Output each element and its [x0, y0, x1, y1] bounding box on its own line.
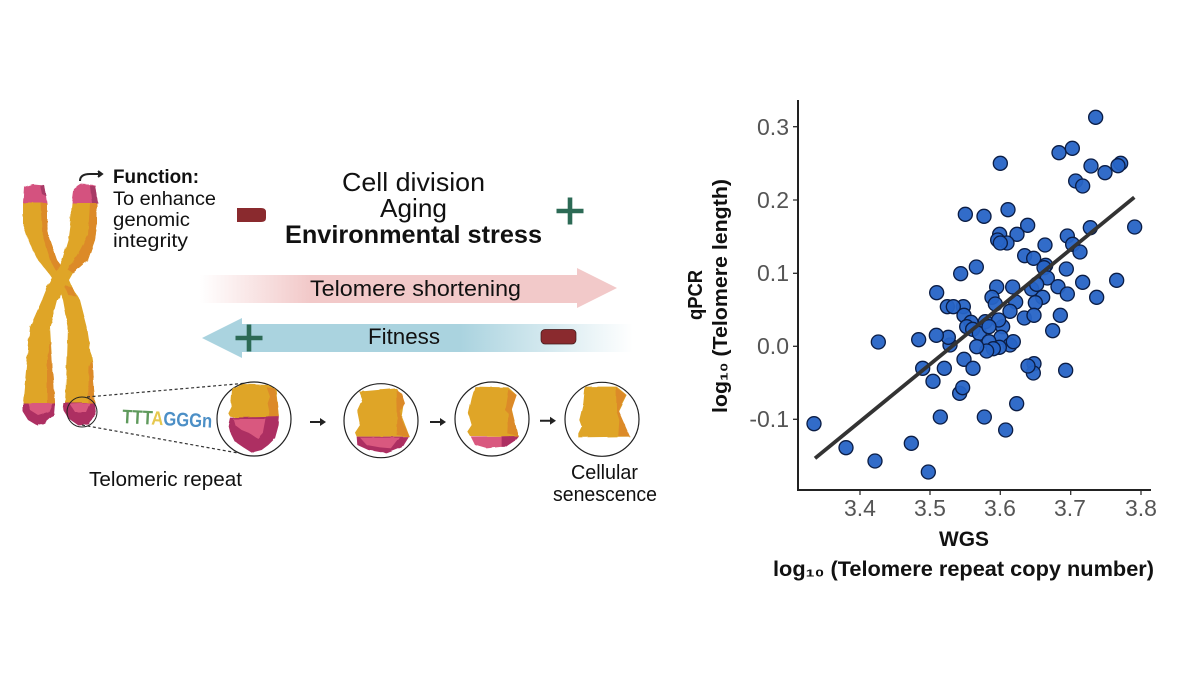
drivers text: [285, 167, 542, 249]
x axis ticks and labels: 3.8: [1125, 495, 1157, 521]
x axis title: log₁₀ (Telomere repeat copy number): [773, 558, 1154, 581]
y axis title: [685, 179, 732, 413]
icon: minus sign top: [237, 208, 266, 222]
x axis ticks and labels: [844, 490, 1157, 521]
label: telomeric repeat: Telomeric repeat: [89, 469, 242, 491]
icon: bent arrow: [80, 171, 102, 181]
arrow: telomere shortening: [200, 268, 617, 308]
telomeric sequence: TTTAGGGn: [122, 406, 213, 433]
axes: [798, 100, 1151, 490]
y axis ticks and labels: 0.2: [757, 187, 789, 213]
icon: arrow 3: [540, 417, 556, 425]
x axis ticks and labels: 3.6: [984, 495, 1016, 521]
y axis ticks and labels: 0.1: [757, 260, 789, 286]
drivers text: Cell division: [342, 167, 485, 197]
function text: To enhance: [113, 189, 216, 210]
drivers text: Environmental stress: [285, 221, 542, 249]
icon: arrow 1: [310, 418, 326, 426]
y axis title: log₁₀ (Telomere length): [710, 179, 732, 413]
x axis title: WGS: [939, 528, 989, 551]
y axis ticks and labels: 0.0: [757, 333, 789, 359]
drivers text: Aging: [380, 193, 447, 223]
scatter plot: [685, 100, 1157, 581]
y axis ticks and labels: 0.3: [757, 114, 789, 140]
icon: plus sign top: [556, 198, 584, 224]
x axis ticks and labels: 3.7: [1054, 495, 1086, 521]
arrow: fitness: Fitness: [368, 324, 440, 349]
icon: telomere stage 2: [344, 384, 418, 458]
x axis title: [773, 528, 1154, 581]
function text: Function:: [113, 167, 199, 188]
function text: genomic: [113, 210, 190, 231]
zoom guide lines: [82, 383, 248, 453]
icon: minus sign bottom: [541, 330, 576, 344]
label: cellular senescence: Cellular: [571, 462, 638, 484]
icon: telomere stage 1: [217, 382, 291, 456]
icon: small zoom circle: [67, 397, 97, 427]
label: cellular senescence: senescence: [553, 484, 657, 506]
data points: [807, 110, 1142, 479]
regression line: [815, 197, 1134, 458]
x axis ticks and labels: 3.5: [914, 495, 946, 521]
icon: plus sign bottom: [236, 324, 262, 352]
icon: telomere stage 4: [565, 382, 639, 456]
icon: telomere stage 3: [455, 382, 529, 456]
panel: telomere diagram: [23, 167, 657, 506]
icon: arrow 2: [430, 418, 446, 426]
label: cellular senescence: [553, 462, 657, 506]
y axis ticks and labels: -0.1: [749, 406, 789, 432]
arrow: telomere shortening: Telomere shortening: [310, 276, 521, 301]
x axis ticks and labels: 3.4: [844, 495, 876, 521]
function text: integrity: [113, 231, 189, 252]
icon: chromosome: [23, 184, 98, 426]
y axis title: qPCR: [685, 269, 707, 320]
arrow: fitness: [202, 318, 633, 358]
function text: [113, 167, 216, 252]
y axis ticks and labels: [749, 114, 798, 432]
